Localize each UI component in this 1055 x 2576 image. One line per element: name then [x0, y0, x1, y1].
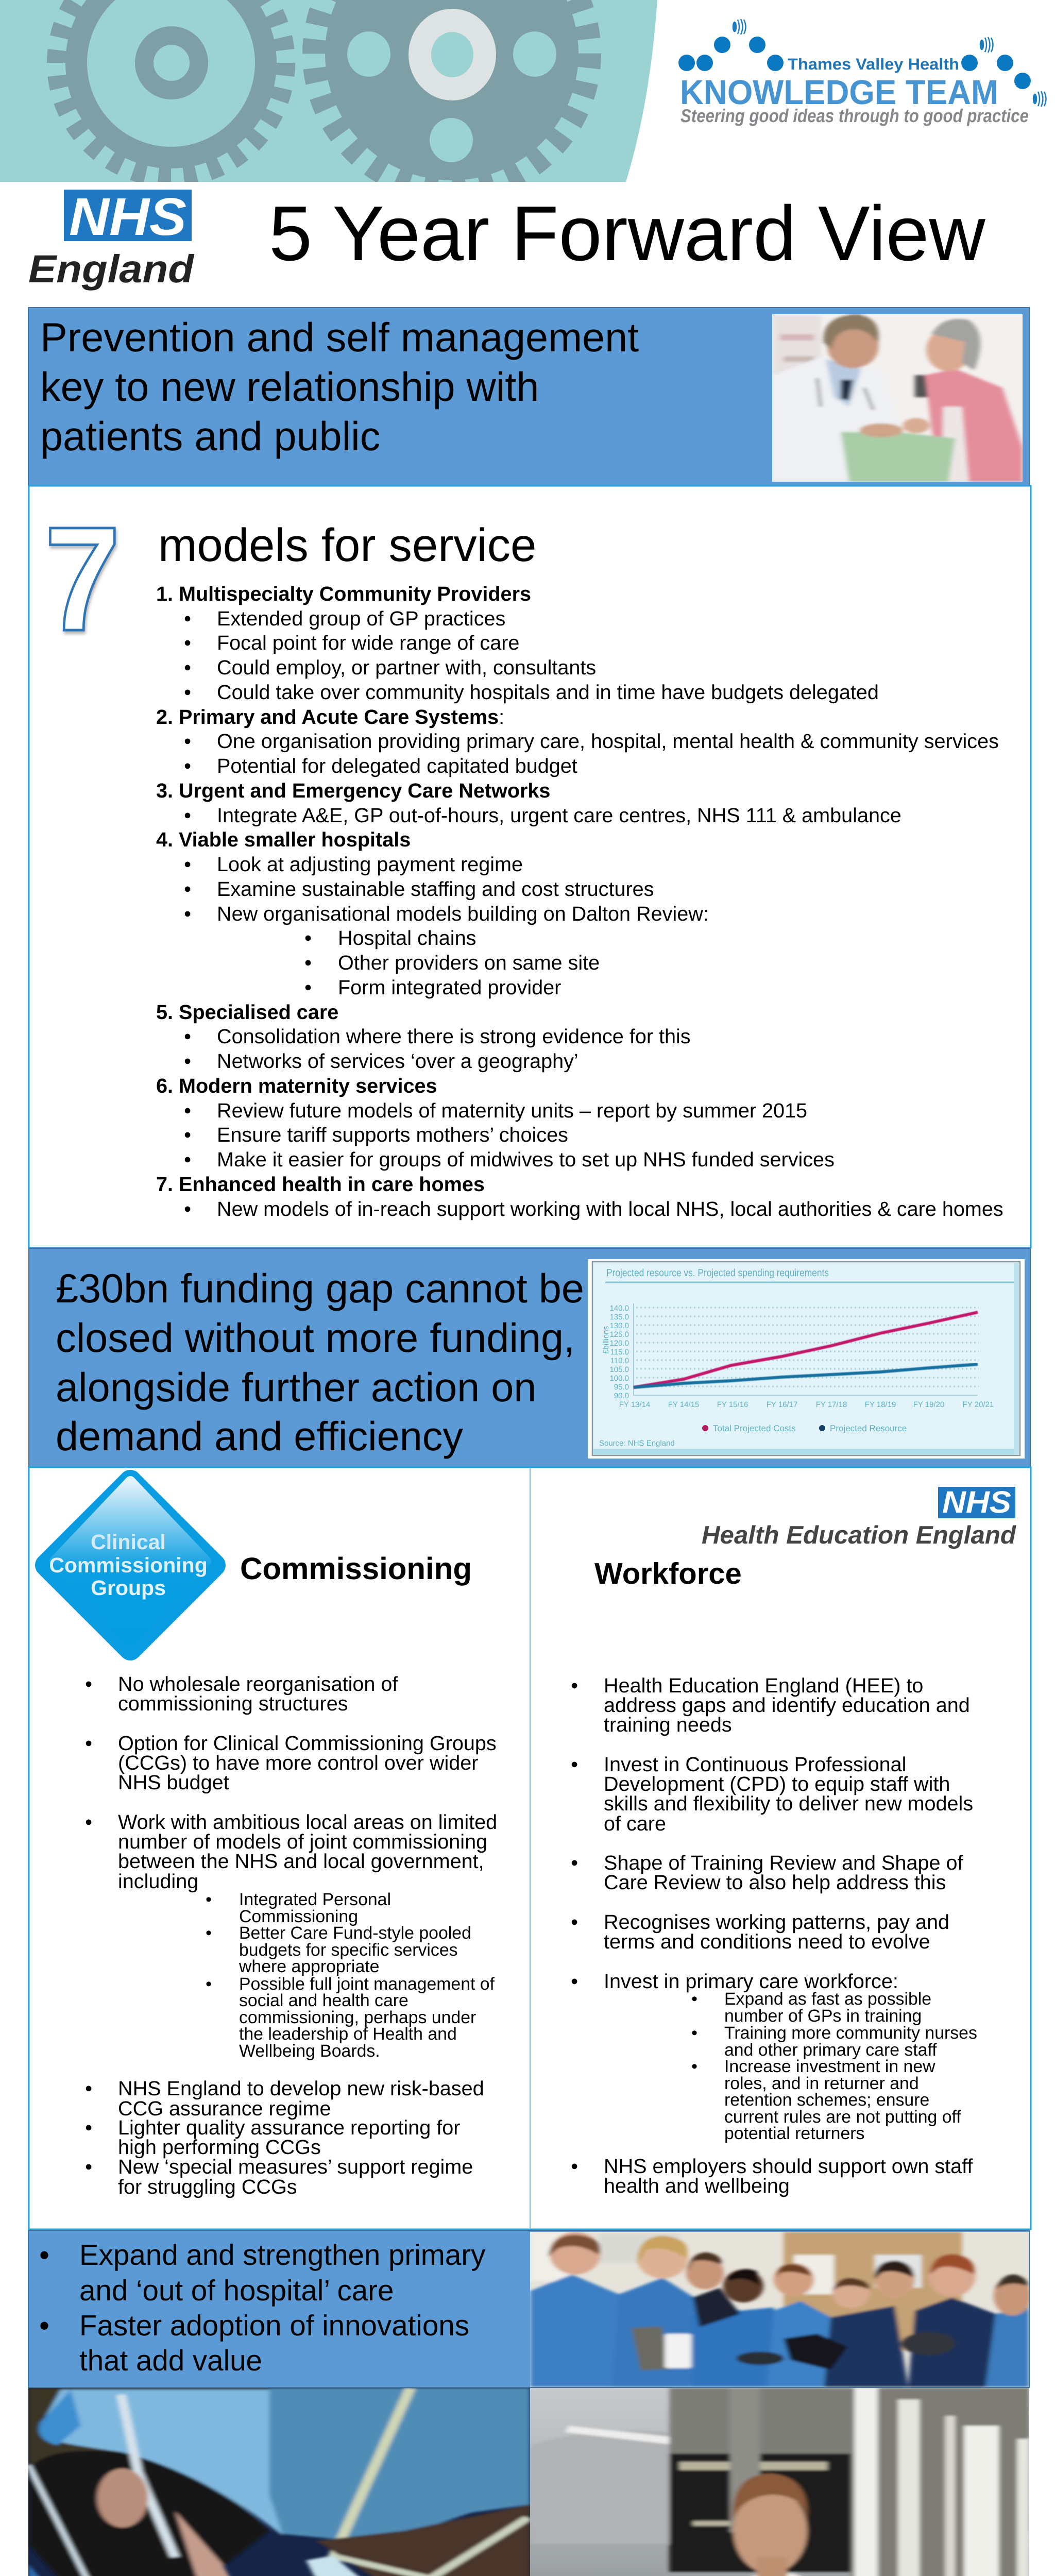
- list: workforce points: Invest in primary care workforce:: [604, 1970, 898, 1993]
- list: commissioning points: No wholesale reorganisation of: [118, 1673, 398, 1696]
- list: commissioning points: the leadership of Health and: [239, 2024, 457, 2044]
- list: workforce points: [571, 1674, 977, 2197]
- list: workforce points: potential returners: [724, 2124, 864, 2143]
- list: commissioning points: CCG assurance regime: [118, 2097, 331, 2120]
- text: primary care bullets: and ‘out of hospital’ care: [79, 2274, 394, 2307]
- model 4: •: [304, 927, 312, 950]
- model 5: •: [184, 1025, 191, 1048]
- text: primary care bullets: •: [39, 2239, 49, 2271]
- y axis labels: 115.0: [610, 1348, 629, 1357]
- icon: left gear: [57, 0, 285, 177]
- model 2: 2. Primary and Acute Care Systems:: [156, 706, 504, 728]
- model 7: New models of in-reach support working with local NHS, local authorities & care homes: [217, 1198, 1003, 1221]
- logo: NHS England: England: [28, 247, 195, 291]
- list: workforce points: skills and flexibility to deliver new models: [604, 1792, 973, 1815]
- x axis labels: FY 13/14: [619, 1400, 650, 1409]
- photo: man in shirt and tie: [530, 2388, 1029, 2576]
- model 4: •: [184, 853, 191, 876]
- logo: Thames Valley Health Knowledge Team: Thames Valley Health: [788, 55, 959, 73]
- model 4: •: [184, 878, 191, 901]
- list: workforce points: of care: [604, 1812, 666, 1835]
- icon: Clinical Commissioning Groups diamond: Clinical: [91, 1530, 166, 1554]
- icon: right gear: [314, 0, 589, 191]
- list: commissioning points: Integrated Personal: [239, 1890, 391, 1909]
- list: commissioning points: Possible full joint management of: [239, 1974, 495, 1994]
- panel: commissioning and workforce: [29, 1467, 1031, 2229]
- text: primary care bullets: •: [39, 2309, 49, 2342]
- list: commissioning points: [85, 1673, 497, 2198]
- heading: models for service: models for service: [158, 519, 536, 571]
- icon: Clinical Commissioning Groups diamond: Groups: [91, 1576, 166, 1600]
- model 1: Focal point for wide range of care: [217, 632, 519, 654]
- logo: NHS Health Education England: NHS: [942, 1485, 1011, 1519]
- list: workforce points: •: [571, 1674, 578, 1697]
- chart source: Source: NHS England: [599, 1439, 675, 1448]
- x axis labels: FY 17/18: [816, 1400, 847, 1409]
- text: primary care bullets: Expand and strengthen primary: [79, 2239, 486, 2271]
- list: workforce points: •: [571, 1970, 578, 1993]
- model 1: [156, 583, 879, 704]
- list: workforce points: training needs: [604, 1714, 732, 1736]
- y axis labels: [602, 1304, 629, 1400]
- list: workforce points: Training more community nurses: [724, 2023, 977, 2043]
- panel: prevention and self management: [28, 308, 1029, 486]
- list: workforce points: •: [571, 1852, 578, 1874]
- chart title: Projected resource vs. Projected spending requirements: [606, 1267, 829, 1279]
- x axis labels: FY 16/17: [767, 1400, 797, 1409]
- logo: Thames Valley Health Knowledge Team: [678, 19, 1046, 126]
- photo: doctor and patient: [772, 314, 1023, 482]
- model 7: [156, 1173, 1003, 1221]
- model 1: 1. Multispecialty Community Providers: [156, 583, 531, 605]
- heading: workforce: Workforce: [594, 1557, 742, 1590]
- list: workforce points: NHS employers should support own staff: [604, 2155, 973, 2178]
- x axis labels: FY 15/16: [717, 1400, 748, 1409]
- model 2: Potential for delegated capitated budget: [217, 755, 577, 777]
- list: workforce points: terms and conditions need to evolve: [604, 1930, 930, 1953]
- model 1: Could employ, or partner with, consultants: [217, 656, 596, 679]
- logo: Thames Valley Health Knowledge Team: KNOWLEDGE TEAM: [680, 73, 998, 112]
- model 4: New organisational models building on Dalton Review:: [217, 903, 709, 925]
- x axis labels: FY 19/20: [913, 1400, 944, 1409]
- model 5: [156, 1001, 691, 1073]
- icon: Clinical Commissioning Groups diamond: [46, 1481, 214, 1649]
- y axis labels: 120.0: [609, 1339, 629, 1348]
- list: commissioning points: •: [85, 1811, 92, 1834]
- y axis labels: 130.0: [609, 1321, 629, 1330]
- model 1: Could take over community hospitals and in time have budgets delegated: [217, 681, 879, 704]
- list: commissioning points: •: [85, 1732, 92, 1755]
- list: workforce points: health and wellbeing: [604, 2175, 790, 2197]
- y axis labels: £billions: [602, 1326, 610, 1354]
- y axis labels: 90.0: [614, 1392, 629, 1400]
- model 2: •: [184, 755, 191, 777]
- x axis labels: FY 18/19: [865, 1400, 896, 1409]
- heading: funding gap text: £30bn funding gap cannot be: [56, 1265, 584, 1311]
- model 7: 7. Enhanced health in care homes: [156, 1173, 485, 1196]
- y axis labels: 135.0: [609, 1313, 629, 1321]
- list: commissioning points: commissioning, perhaps under: [239, 2008, 476, 2027]
- list: workforce points: •: [571, 2155, 578, 2178]
- list: commissioning points: number of models of joint commissioning: [118, 1831, 487, 1853]
- x axis labels: FY 20/21: [963, 1400, 994, 1409]
- icon: Clinical Commissioning Groups diamond: Commissioning: [49, 1553, 208, 1577]
- x axis labels: FY 14/15: [668, 1400, 699, 1409]
- y axis labels: 100.0: [609, 1374, 629, 1383]
- photo: nursing team: [530, 2232, 1029, 2387]
- text: primary care bullets: [39, 2239, 486, 2377]
- heading: funding gap text: closed without more funding,: [56, 1315, 575, 1361]
- list: workforce points: Care Review to also help address this: [604, 1871, 946, 1894]
- list: commissioning points: where appropriate: [239, 1957, 379, 1976]
- model 4: Other providers on same site: [338, 952, 600, 974]
- panel: funding gap: [29, 1248, 1030, 1467]
- model 4: •: [304, 976, 312, 999]
- model 6: •: [184, 1099, 191, 1122]
- heading: prevention text: Prevention and self management: [40, 314, 639, 360]
- list: commissioning points: budgets for specific services: [239, 1940, 458, 1960]
- list: commissioning points: between the NHS and local government,: [118, 1850, 484, 1873]
- model 3: Integrate A&E, GP out-of-hours, urgent care centres, NHS 111 & ambulance: [217, 804, 901, 827]
- heading: funding gap text: alongside further action on: [56, 1364, 536, 1410]
- list: commissioning points: •: [85, 2116, 92, 2139]
- list: commissioning points: Option for Clinical Commissioning Groups: [118, 1732, 497, 1755]
- model 1: Extended group of GP practices: [217, 607, 505, 630]
- model 3: 3. Urgent and Emergency Care Networks: [156, 779, 550, 802]
- model 4: Look at adjusting payment regime: [217, 853, 523, 876]
- logo: NHS Health Education England: Health Education England: [702, 1521, 1016, 1549]
- list: workforce points: current rules are not putting off: [724, 2107, 961, 2127]
- model 4: 4. Viable smaller hospitals: [156, 828, 411, 851]
- logo: NHS England: NHS: [69, 187, 186, 246]
- heading: prevention text: patients and public: [40, 413, 380, 459]
- heading: funding gap text: demand and efficiency: [56, 1413, 463, 1459]
- list: workforce points: Shape of Training Review and Shape of: [604, 1852, 963, 1874]
- model 5: Networks of services ‘over a geography’: [217, 1050, 578, 1073]
- list: commissioning points: Commissioning: [239, 1907, 358, 1926]
- list: commissioning points: •: [85, 1673, 92, 1696]
- model 6: Make it easier for groups of midwives to set up NHS funded services: [217, 1148, 835, 1171]
- model 3: [156, 779, 901, 827]
- panel: primary care and innovation: [28, 2230, 1031, 2387]
- panel: 7 models for service: [29, 486, 1031, 1248]
- heading: prevention text: key to new relationship with: [40, 364, 539, 410]
- model 2: One organisation providing primary care, hospital, mental health & community services: [217, 730, 999, 753]
- y axis labels: 125.0: [609, 1330, 629, 1339]
- list: commissioning points: •: [85, 2077, 92, 2100]
- model 4: [156, 828, 709, 999]
- model 5: Consolidation where there is strong evidence for this: [217, 1025, 691, 1048]
- model 1: •: [184, 656, 191, 679]
- list: commissioning points: Work with ambitious local areas on limited: [118, 1811, 497, 1834]
- list: workforce points: Recognises working patterns, pay and: [604, 1911, 949, 1934]
- list: commissioning points: Better Care Fund-style pooled: [239, 1923, 471, 1943]
- list: commissioning points: Lighter quality assurance reporting for: [118, 2116, 460, 2139]
- model 6: [156, 1075, 835, 1171]
- model 2: [156, 706, 999, 777]
- model 4: Form integrated provider: [338, 976, 561, 999]
- list: commissioning points: •: [206, 1890, 212, 1909]
- chart legend: [702, 1423, 907, 1433]
- model 5: 5. Specialised care: [156, 1001, 338, 1024]
- line: projected resource: [634, 1364, 978, 1387]
- list: commissioning points: high performing CCGs: [118, 2136, 321, 2159]
- model 6: Ensure tariff supports mothers’ choices: [217, 1124, 568, 1146]
- list: commissioning points: •: [206, 1923, 212, 1943]
- model 1: •: [184, 681, 191, 704]
- list: workforce points: Health Education England (HEE) to: [604, 1674, 923, 1697]
- model 3: •: [184, 804, 191, 827]
- list: commissioning points: •: [206, 1974, 212, 1994]
- list: workforce points: and other primary care staff: [724, 2040, 937, 2060]
- logo: NHS Health Education England: [702, 1485, 1016, 1549]
- list: commissioning points: New ‘special measures’ support regime: [118, 2156, 473, 2178]
- list: workforce points: •: [691, 2023, 697, 2043]
- text: primary care bullets: Faster adoption of innovations: [79, 2309, 469, 2342]
- model 5: •: [184, 1050, 191, 1073]
- y axis labels: 95.0: [614, 1383, 629, 1392]
- list: commissioning points: Wellbeing Boards.: [239, 2041, 380, 2061]
- list: workforce points: roles, and in returner and: [724, 2074, 919, 2093]
- model 4: Examine sustainable staffing and cost structures: [217, 878, 654, 901]
- list: workforce points: •: [571, 1911, 578, 1934]
- model 2: •: [184, 730, 191, 753]
- model 6: •: [184, 1148, 191, 1171]
- header banner with gears: [0, 0, 657, 182]
- chart: projected resource vs spending: [588, 1259, 1025, 1459]
- line: total projected costs: [634, 1312, 978, 1387]
- list: workforce points: Development (CPD) to equip staff with: [604, 1773, 950, 1795]
- list: workforce points: Increase investment in new: [724, 2057, 935, 2076]
- model 4: •: [304, 952, 312, 974]
- list: workforce points: retention schemes; ensure: [724, 2090, 929, 2110]
- model 1: •: [184, 632, 191, 654]
- list: workforce points: Expand as fast as possible: [724, 1989, 931, 2009]
- model 4: Hospital chains: [338, 927, 476, 950]
- model 6: Review future models of maternity units – report by summer 2015: [217, 1099, 807, 1122]
- list: commissioning points: commissioning structures: [118, 1692, 348, 1715]
- list: workforce points: •: [571, 1753, 578, 1776]
- list: commissioning points: social and health care: [239, 1991, 409, 2010]
- list: commissioning points: including: [118, 1870, 198, 1893]
- x axis labels: [619, 1400, 994, 1409]
- logo: NHS England: [28, 187, 195, 291]
- title: 5 Year Forward View: [269, 190, 986, 277]
- text: primary care bullets: that add value: [79, 2344, 262, 2377]
- y axis labels: 110.0: [610, 1357, 629, 1365]
- list: commissioning points: NHS budget: [118, 1771, 229, 1794]
- photo: surgeons: [28, 2388, 530, 2576]
- list: workforce points: number of GPs in training: [724, 2006, 922, 2026]
- list: commissioning points: NHS England to develop new risk-based: [118, 2077, 484, 2100]
- model 4: •: [184, 903, 191, 925]
- list: commissioning points: for struggling CCGs: [118, 2176, 297, 2198]
- list: workforce points: •: [691, 2057, 697, 2076]
- model 6: 6. Modern maternity services: [156, 1075, 437, 1097]
- model 1: •: [184, 607, 191, 630]
- list: workforce points: Invest in Continuous Professional: [604, 1753, 906, 1776]
- heading: commissioning: Commissioning: [240, 1551, 472, 1586]
- icon: outlined numeral 7: 7: [44, 496, 121, 662]
- y axis labels: 105.0: [609, 1365, 629, 1374]
- y axis labels: 140.0: [609, 1304, 629, 1313]
- chart legend: Total Projected Costs: [713, 1423, 796, 1433]
- list: commissioning points: (CCGs) to have more control over wider: [118, 1752, 478, 1774]
- model 7: •: [184, 1198, 191, 1221]
- model 6: •: [184, 1124, 191, 1146]
- list: workforce points: •: [691, 1989, 697, 2009]
- list: workforce points: address gaps and identify education and: [604, 1694, 970, 1717]
- list: commissioning points: •: [85, 2156, 92, 2178]
- chart legend: Projected Resource: [830, 1423, 907, 1433]
